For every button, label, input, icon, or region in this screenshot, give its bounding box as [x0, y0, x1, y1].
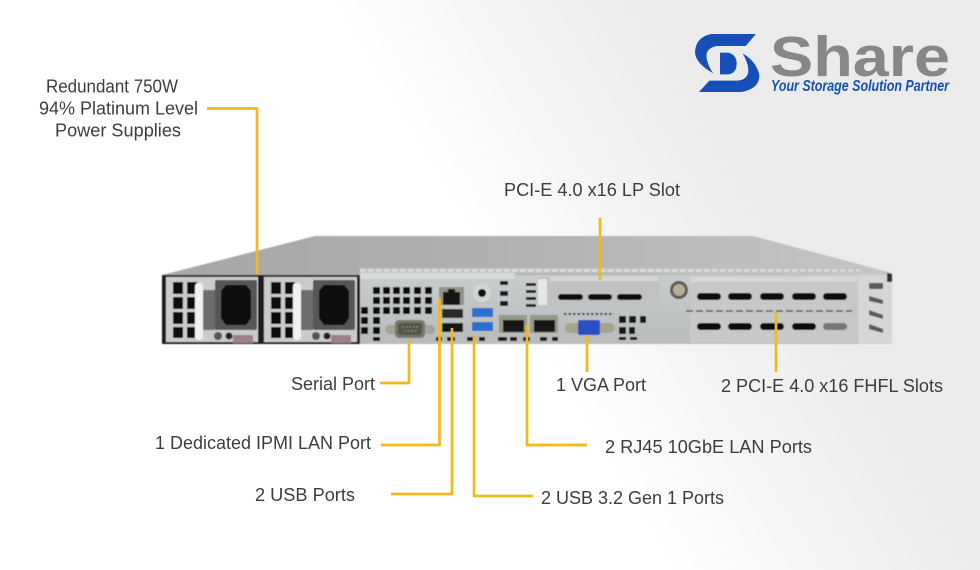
full-height PCI-E slots: [686, 277, 857, 343]
callout: USB ports: [255, 328, 452, 505]
thumbscrew: [670, 281, 688, 299]
VGA port: [564, 314, 615, 335]
vent squares: [619, 316, 646, 340]
callout: serial port: [291, 340, 409, 394]
callout: USB ports: 2 USB Ports: [255, 485, 355, 505]
callout: USB 3.2 ports: [474, 337, 724, 508]
power supply 1: [162, 275, 261, 344]
bottom slits: [436, 337, 558, 341]
callout: USB 3.2 ports: 2 USB 3.2 Gen 1 Ports: [541, 488, 724, 508]
IPMI LAN port: [439, 287, 464, 305]
grounding stud: [473, 284, 491, 302]
side vent bars: [526, 283, 536, 307]
USB ports: [442, 309, 463, 332]
label: power supplies: [39, 76, 198, 140]
logo wordmark: Share: [770, 25, 950, 89]
callout: VGA port: [556, 335, 646, 395]
label: power supplies: 94% Platinum Level: [39, 98, 198, 118]
callout: VGA port: 1 VGA Port: [556, 375, 646, 395]
USB 3.2 ports: [472, 308, 493, 331]
callout: FHFL slots: 2 PCI-E 4.0 x16 FHFL Slots: [721, 376, 943, 396]
label: power supplies: Redundant 750W: [46, 76, 178, 96]
label: power supplies: Power Supplies: [55, 120, 181, 140]
server chassis rear view: [162, 236, 892, 344]
callout: IPMI LAN port: [155, 298, 440, 453]
callout: RJ45 LAN ports: [527, 325, 812, 457]
RJ45 LAN ports: [499, 315, 558, 333]
vent grille: [361, 287, 432, 341]
callout: serial port: Serial Port: [291, 374, 375, 394]
callout: IPMI LAN port: 1 Dedicated IPMI LAN Port: [155, 433, 371, 453]
right side handle: [858, 273, 892, 344]
callout: PCI-E LP slot: PCI-E 4.0 x16 LP Slot: [504, 180, 680, 200]
low-profile PCI-E slot bracket: [538, 277, 659, 309]
serial port: [385, 320, 435, 338]
chassis rear face: [162, 275, 892, 344]
callout: RJ45 LAN ports: 2 RJ45 10GbE LAN Ports: [605, 437, 812, 457]
chassis top surface: [162, 236, 892, 280]
logo: Share: [695, 25, 950, 95]
logo icon: blue S D mark: [695, 34, 759, 92]
callout: power supplies: [39, 76, 257, 274]
small status slots: [500, 281, 508, 306]
leader line: power supplies: [207, 108, 257, 274]
power supply 2: [260, 275, 360, 344]
